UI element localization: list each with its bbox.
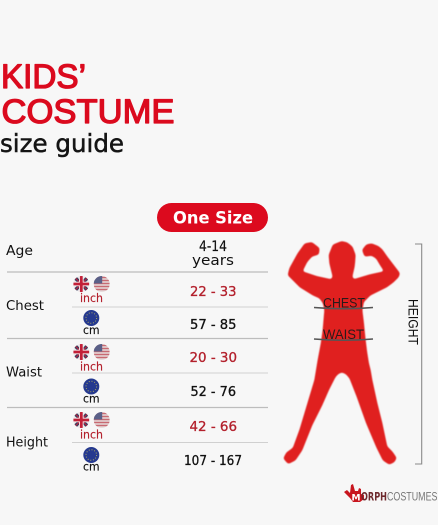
age row: 4-14: [199, 239, 227, 255]
waist row: Waist: [6, 364, 42, 380]
waist measure: WAIST: [323, 326, 364, 342]
waist row: 52 - 76: [190, 384, 236, 400]
chest row: 57 - 85: [190, 317, 236, 333]
height row: inch: [80, 428, 103, 442]
figure silhouette: [284, 242, 399, 464]
chest row: inch: [80, 291, 103, 305]
chest row: 22 - 33: [190, 284, 236, 300]
waist row: [6, 344, 237, 406]
brand logo: M: [352, 494, 361, 504]
age row: Age: [6, 244, 33, 259]
height row: Height: [6, 434, 48, 450]
chest measure: CHEST: [323, 294, 365, 310]
height bracket: HEIGHT: [405, 299, 421, 345]
size header pill: One Size: [173, 208, 253, 228]
chest row: Chest: [6, 298, 44, 314]
waist row: inch: [80, 360, 103, 374]
height row: [6, 412, 242, 474]
age row: [6, 239, 234, 269]
height row: 107 - 167: [184, 453, 242, 469]
title: COSTUME: [2, 93, 174, 131]
brand logo: [344, 484, 438, 504]
chest row: [6, 276, 236, 337]
waist row: 20 - 30: [190, 350, 237, 366]
brand logo: ORPH: [361, 490, 387, 504]
height bracket: [405, 244, 422, 464]
title: size guide: [0, 129, 124, 158]
size header pill: [157, 203, 268, 232]
waist row: cm: [83, 392, 100, 406]
height row: 42 - 66: [190, 419, 237, 435]
age row: years: [192, 253, 234, 269]
title: [0, 58, 174, 158]
chest row: cm: [83, 323, 100, 337]
height row: cm: [83, 460, 100, 474]
title: KIDS’: [1, 58, 86, 96]
